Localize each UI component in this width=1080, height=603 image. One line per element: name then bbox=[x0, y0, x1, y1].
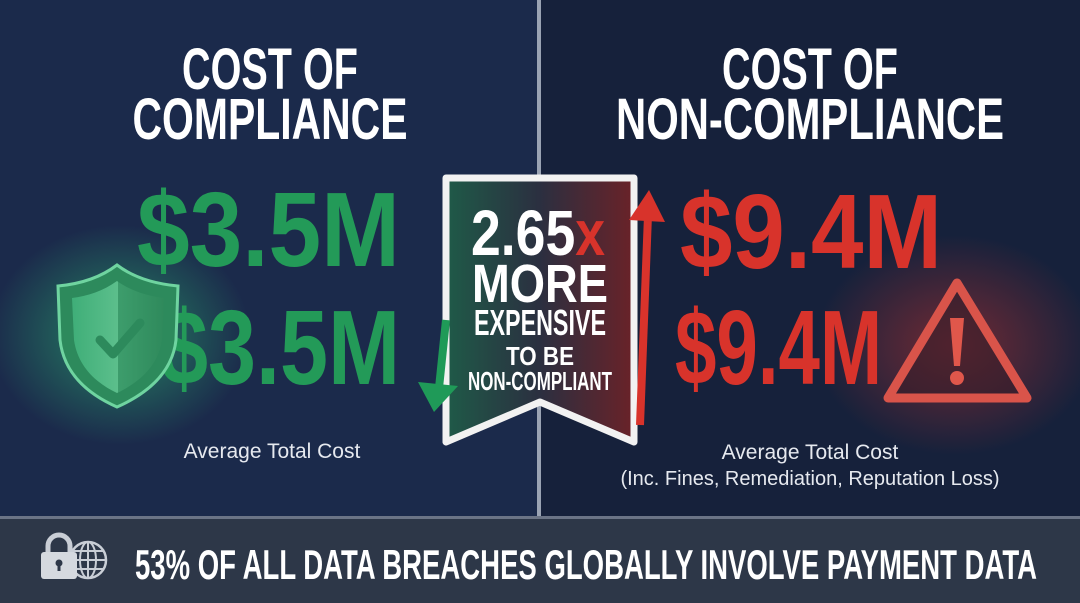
glow: green bbox=[0, 225, 250, 445]
ribbon callout: 2.65x more expensive: 2.65x bbox=[471, 197, 605, 269]
non-compliance cost figures: $9.4M bbox=[675, 289, 882, 407]
title: cost of compliance bbox=[132, 37, 408, 152]
compliance cost figures: $3.5M bbox=[160, 289, 400, 407]
compliance cost figures bbox=[137, 171, 400, 407]
title: cost of compliance: COMPLIANCE bbox=[132, 87, 408, 152]
title: cost of non-compliance: COST OF bbox=[722, 37, 898, 102]
icon: warning triangle bbox=[888, 283, 1027, 398]
icon: padlock and globe bbox=[41, 535, 106, 579]
text: average total cost left: Average Total Cost bbox=[184, 440, 360, 463]
compliance cost figures: $3.5M bbox=[137, 171, 400, 289]
text: average total cost right bbox=[620, 441, 1000, 490]
arrow: red up bbox=[629, 190, 665, 425]
footer bar bbox=[0, 516, 1080, 603]
non-compliance cost figures bbox=[675, 173, 942, 407]
arrow: green down bbox=[418, 320, 458, 412]
icon: shield with check bbox=[58, 265, 178, 407]
non-compliance cost figures: $9.4M bbox=[680, 173, 942, 291]
ribbon callout: 2.65x more expensive: MORE bbox=[472, 254, 608, 314]
ribbon callout: 2.65x more expensive: EXPENSIVE bbox=[474, 302, 606, 343]
ribbon callout: 2.65x more expensive bbox=[446, 178, 634, 442]
ribbon callout: 2.65x more expensive: NON-COMPLIANT bbox=[468, 366, 612, 396]
title: cost of compliance: COST OF bbox=[182, 37, 358, 102]
text: average total cost right: (Inc. Fines, Remediation, Reputation Loss) bbox=[620, 468, 1000, 490]
ribbon callout: 2.65x more expensive: TO BE bbox=[506, 341, 574, 371]
glow: red bbox=[815, 235, 1080, 455]
text: average total cost right: Average Total Cost bbox=[722, 441, 898, 464]
title: cost of non-compliance bbox=[616, 37, 1004, 152]
panel: right background bbox=[540, 0, 1080, 518]
panel: left background bbox=[0, 0, 540, 518]
